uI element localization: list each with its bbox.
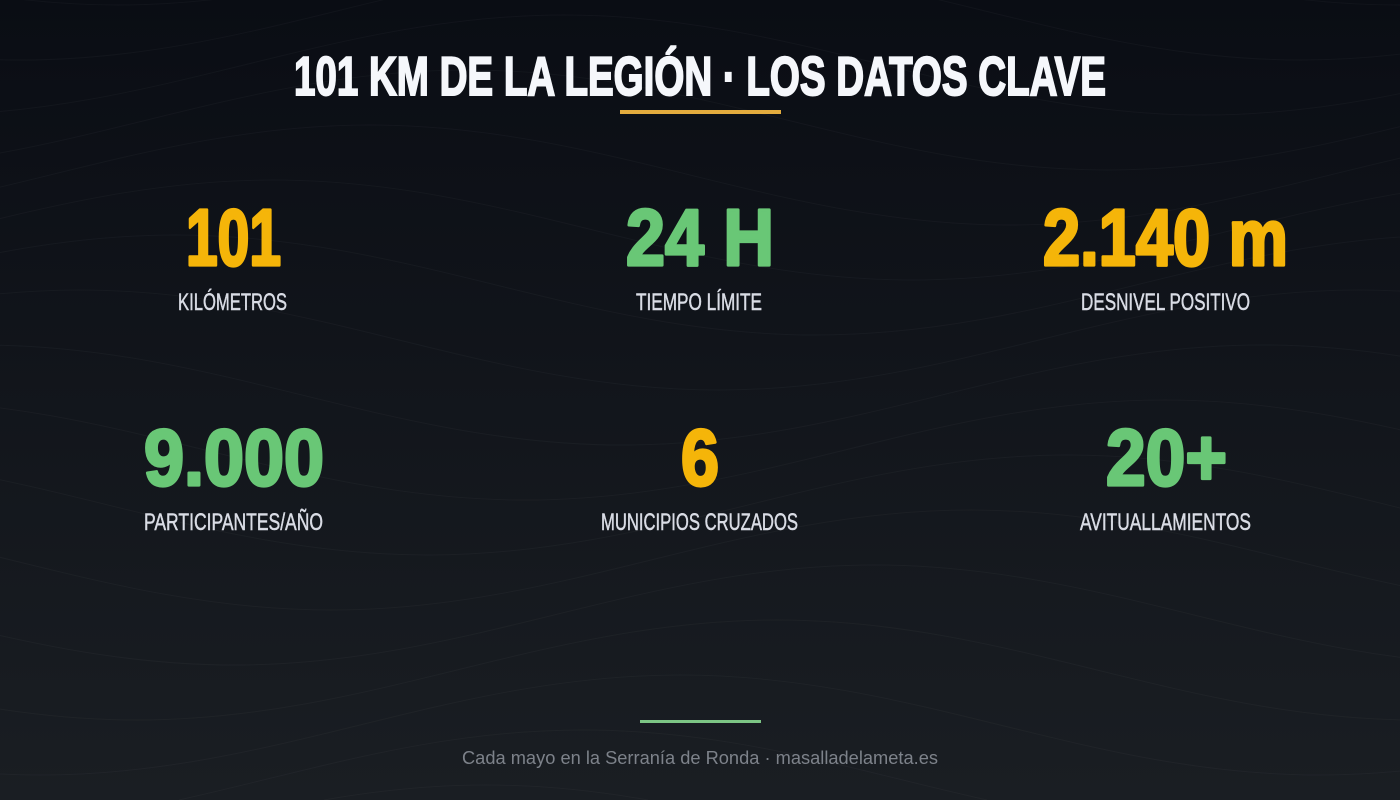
stat: desnivel positivo: DESNIVEL POSITIVO xyxy=(1081,289,1250,316)
stat: kilómetros: 101 xyxy=(186,193,281,282)
stat: desnivel positivo: 2.140 m xyxy=(1043,193,1288,282)
stat: kilómetros xyxy=(178,193,287,316)
stat: municipios xyxy=(601,413,798,536)
stat: tiempo límite: 24 H xyxy=(626,193,774,282)
footer text: Cada mayo en la Serranía de Ronda · masalladelameta.es xyxy=(462,747,938,768)
stat: municipios: MUNICIPIOS CRUZADOS xyxy=(601,509,798,536)
stat: participantes: 9.000 xyxy=(144,413,324,502)
title underline xyxy=(620,110,781,114)
stat: municipios: 6 xyxy=(681,413,719,502)
stat: tiempo límite: TIEMPO LÍMITE xyxy=(636,289,762,316)
footer rule xyxy=(640,720,761,723)
stat: avituallamientos: AVITUALLAMIENTOS xyxy=(1080,509,1251,536)
stat: desnivel positivo xyxy=(1043,193,1288,316)
stat: kilómetros: KILÓMETROS xyxy=(178,289,287,316)
stat: participantes xyxy=(144,413,324,536)
stat: avituallamientos: 20+ xyxy=(1106,413,1227,502)
stat: tiempo límite xyxy=(626,193,774,316)
stat: participantes: PARTICIPANTES/AÑO xyxy=(144,509,323,536)
stat: avituallamientos xyxy=(1080,413,1251,536)
